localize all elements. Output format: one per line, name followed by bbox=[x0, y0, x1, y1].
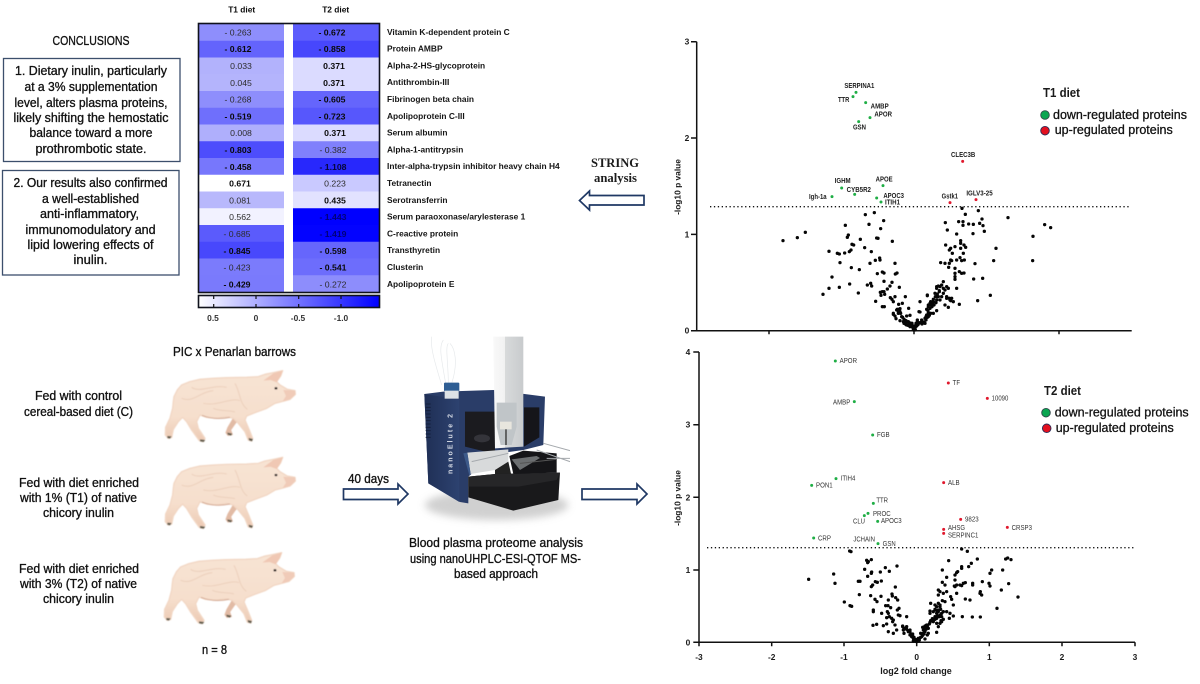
T2 axes: 0 bbox=[914, 652, 919, 662]
T2 diet values: - 1.443 bbox=[319, 212, 347, 222]
legend: T1 diet: up-regulated proteins bbox=[1055, 123, 1173, 137]
heatmap column headers bbox=[228, 5, 349, 15]
T1 diet values: 0.008 bbox=[230, 128, 252, 138]
T2 protein labels: SERPINC1 bbox=[948, 531, 978, 540]
protein names: Serum albumin bbox=[387, 128, 448, 138]
T1 diet values: - 0.612 bbox=[224, 44, 252, 54]
T1 protein labels: IGLV3-25 bbox=[966, 189, 993, 198]
T2 protein labels: PON1 bbox=[816, 481, 833, 490]
text: T1 diet: Fed with diet enriched bbox=[19, 476, 139, 490]
icon: pig T1 bbox=[165, 457, 295, 529]
legend: T2 diet bbox=[1042, 384, 1189, 435]
T2 protein labels: ALB bbox=[948, 478, 960, 487]
T2 protein labels: CRP bbox=[818, 533, 831, 542]
panel: conclusion 2: lipid lowering effects of bbox=[28, 238, 154, 252]
text: control diet bbox=[24, 389, 133, 419]
T2 protein labels: GSN bbox=[883, 539, 896, 548]
protein names: Fibrinogen beta chain bbox=[387, 94, 474, 104]
text: sample size: n = 8 bbox=[202, 643, 227, 657]
text: T2 diet: with 3% (T2) of native bbox=[19, 577, 137, 591]
text: 40 days: 40 days bbox=[348, 472, 389, 486]
T2 diet values: - 0.723 bbox=[318, 111, 346, 121]
text: control diet: Fed with control bbox=[35, 389, 122, 403]
T2 protein labels: JCHAIN bbox=[853, 535, 875, 544]
T2 diet values: - 1.419 bbox=[319, 229, 347, 239]
text: T2 diet bbox=[19, 562, 139, 606]
panel: conclusion 2: 2. Our results also confirmed bbox=[14, 176, 168, 190]
panel: conclusion 2: a well-established bbox=[42, 192, 139, 206]
T2 diet values: 0.435 bbox=[324, 195, 346, 205]
T2 axes: 3 bbox=[1133, 652, 1138, 662]
T2 non-significant points bbox=[809, 549, 1018, 642]
T1 protein labels: APOE bbox=[876, 175, 893, 184]
protein names: Serotransferrin bbox=[387, 195, 448, 205]
T2 axes: 2 bbox=[686, 492, 691, 502]
T1 diet values: - 0.803 bbox=[224, 145, 252, 155]
legend: T1 diet: T1 diet bbox=[1043, 86, 1081, 100]
arrow: STRING analysis to heatmap bbox=[580, 191, 644, 210]
T1 diet values: - 0.268 bbox=[224, 95, 252, 105]
panel: conclusion 2: inulin. bbox=[74, 253, 108, 267]
text: T1 diet: chicory inulin bbox=[43, 506, 114, 520]
legend: T2 diet: T2 diet bbox=[1044, 384, 1082, 398]
T2 protein labels: AMBP bbox=[833, 397, 850, 406]
T2 axes: -3 bbox=[695, 652, 703, 662]
T2 protein labels bbox=[816, 356, 1032, 548]
protein names: Vitamin K-dependent protein C bbox=[387, 27, 510, 37]
legend: T2 diet: up-regulated proteins bbox=[1056, 421, 1174, 435]
T2 diet values: - 0.541 bbox=[319, 263, 347, 273]
heatmap colour scale: 0 bbox=[254, 313, 259, 323]
T2 up-regulated points bbox=[944, 383, 1007, 533]
T1 diet values: 0.671 bbox=[229, 179, 251, 189]
T2 axes: -log10 p value bbox=[672, 470, 682, 526]
icon: pig control bbox=[165, 371, 295, 442]
panel: conclusion 1: likely shifting the hemostatic bbox=[14, 111, 168, 125]
T2 protein labels: CLU bbox=[853, 517, 865, 526]
T1 up-regulated points bbox=[950, 161, 976, 203]
T2 diet values: - 0.382 bbox=[319, 145, 347, 155]
T1 protein labels: CLEC3B bbox=[951, 150, 975, 159]
T1 protein labels: APOC3 bbox=[883, 191, 904, 200]
text: T1 diet: with 1% (T1) of native bbox=[19, 491, 137, 505]
T2 protein labels: APOR bbox=[840, 356, 857, 365]
volcano plot: T2 diet bbox=[672, 347, 1138, 676]
arrow: 40 days bbox=[344, 484, 408, 504]
heatmap column headers: T2 diet bbox=[322, 5, 349, 15]
T1 protein labels bbox=[809, 81, 993, 206]
T1 protein labels: IGHM bbox=[835, 176, 851, 185]
text: T1 diet bbox=[19, 476, 139, 520]
T2 protein labels: FGB bbox=[877, 430, 890, 439]
T2 protein labels: CRSP3 bbox=[1012, 523, 1032, 532]
T2 down-regulated points bbox=[812, 361, 878, 544]
protein names: Apolipoprotein C-III bbox=[387, 111, 465, 121]
protein names: Protein AMBP bbox=[387, 44, 443, 54]
T1 protein labels: Igh-1a bbox=[809, 192, 827, 201]
STRING analysis label bbox=[591, 155, 639, 185]
volcano plot: T1 diet bbox=[672, 37, 1132, 336]
T2 axes: -1 bbox=[840, 652, 848, 662]
T2 diet values: 0.223 bbox=[324, 179, 346, 189]
T2 diet values bbox=[318, 27, 347, 289]
T1 diet values: - 0.458 bbox=[224, 162, 252, 172]
T2 diet values: - 0.272 bbox=[319, 279, 347, 289]
icon: nanoElute 2 instrument bbox=[424, 337, 570, 520]
T2 diet values: 0.371 bbox=[323, 61, 345, 71]
T1 protein labels: ITIH1 bbox=[885, 197, 900, 206]
heatmap column headers: T1 diet bbox=[228, 5, 255, 15]
T2 diet values: - 0.672 bbox=[318, 27, 346, 37]
panel: conclusion 1 bbox=[4, 58, 180, 162]
T1 protein labels: CYB5R2 bbox=[847, 185, 871, 194]
T2 protein labels: TTR bbox=[876, 496, 888, 505]
T2 protein labels: 9823 bbox=[965, 515, 979, 524]
T1 axes: 3 bbox=[685, 37, 690, 47]
panel: conclusion 1: level, alters plasma proteins, bbox=[14, 96, 168, 110]
heading: animals: PIC x Penarlan barrows bbox=[173, 345, 296, 359]
T2 diet values: 0.371 bbox=[324, 128, 346, 138]
T1 diet values: 0.562 bbox=[229, 212, 251, 222]
T2 protein labels: APOC3 bbox=[881, 516, 902, 525]
T2 axes: 0 bbox=[686, 637, 691, 647]
T1 axes: 1 bbox=[685, 229, 690, 239]
protein names bbox=[387, 27, 560, 289]
T2 axes: 2 bbox=[1060, 652, 1065, 662]
heatmap colour scale: -0.5 bbox=[291, 313, 306, 323]
T2 diet values: - 0.858 bbox=[318, 44, 346, 54]
T2 axes: log2 fold change bbox=[880, 666, 952, 676]
T2 protein labels: 10090 bbox=[992, 393, 1008, 402]
text: T2 diet: chicory inulin bbox=[43, 592, 114, 606]
legend: T2 diet: down-regulated proteins bbox=[1055, 406, 1189, 420]
T2 diet values: - 1.108 bbox=[319, 162, 347, 172]
T1 diet values: - 0.845 bbox=[223, 246, 251, 256]
legend: T1 diet bbox=[1041, 86, 1187, 137]
T2 protein labels: TF bbox=[953, 378, 960, 387]
T1 axes: 2 bbox=[685, 133, 690, 143]
T2 axes: -2 bbox=[768, 652, 776, 662]
T1 protein labels: AMBP bbox=[871, 101, 889, 110]
T1 protein labels: TTR bbox=[838, 95, 850, 104]
protein names: Clusterin bbox=[387, 262, 423, 272]
T1 diet values: 0.081 bbox=[229, 195, 251, 205]
title: conclusions: CONCLUSIONS bbox=[52, 34, 130, 48]
T1 protein labels: APOR bbox=[874, 110, 893, 119]
protein names: Tetranectin bbox=[387, 178, 432, 188]
T1 diet values: - 0.423 bbox=[223, 263, 251, 273]
T1 diet values: - 0.685 bbox=[223, 229, 251, 239]
T1 protein labels: Gstk1 bbox=[942, 191, 958, 200]
T1 protein labels: GSN bbox=[853, 123, 866, 132]
icon: pig T2 bbox=[164, 553, 294, 624]
heatmap colour scale: 0.5 bbox=[207, 313, 219, 323]
T1 axes: -log10 p value bbox=[672, 159, 682, 215]
T2 axes: 1 bbox=[987, 652, 992, 662]
T2 diet values: - 0.605 bbox=[318, 95, 346, 105]
protein names: C-reactive protein bbox=[387, 228, 458, 238]
text: control diet: cereal-based diet (C) bbox=[24, 405, 133, 419]
panel: conclusion 1: at a 3% supplementation bbox=[24, 80, 158, 94]
T1 non-significant points bbox=[783, 208, 1051, 330]
T2 protein labels: PROC bbox=[873, 509, 891, 518]
T1 diet values bbox=[223, 27, 252, 289]
T1 diet values: 0.033 bbox=[230, 61, 252, 71]
text: proteome analysis: Blood plasma proteome analysis bbox=[409, 536, 583, 550]
T2 axes bbox=[672, 347, 1138, 676]
T2 protein labels: ITIH4 bbox=[841, 474, 855, 483]
panel: conclusion 2: anti-inflammatory, bbox=[40, 207, 139, 221]
heatmap colour scale: -1.0 bbox=[334, 313, 349, 323]
legend: T1 diet: down-regulated proteins bbox=[1053, 108, 1187, 122]
T1 diet values: - 0.429 bbox=[223, 279, 251, 289]
T1 diet values: - 0.519 bbox=[224, 111, 252, 121]
STRING analysis label: analysis bbox=[594, 170, 637, 185]
text: proteome analysis: using nanoUHPLC-ESI-QTOF MS- bbox=[410, 552, 581, 566]
T2 diet values: 0.371 bbox=[323, 78, 345, 88]
text: proteome analysis bbox=[409, 536, 583, 581]
heatmap bbox=[198, 5, 560, 323]
heatmap cells bbox=[198, 24, 380, 292]
protein names: Antithrombin-III bbox=[387, 77, 449, 87]
T1 axes: 0 bbox=[685, 326, 690, 336]
protein names: Apolipoprotein E bbox=[387, 279, 455, 289]
T1 diet values: - 0.263 bbox=[224, 27, 252, 37]
T1 diet values: 0.045 bbox=[230, 78, 252, 88]
T1 down-regulated points bbox=[832, 92, 883, 202]
panel: conclusion 1: prothrombotic state. bbox=[36, 142, 146, 156]
icon: nanoElute 2 instrument: nanoElute 2 bbox=[448, 414, 455, 474]
protein names: Serum paraoxonase/arylesterase 1 bbox=[387, 212, 526, 222]
T2 axes: 4 bbox=[686, 347, 691, 357]
heatmap colour scale bbox=[198, 296, 380, 323]
T2 diet values: - 0.598 bbox=[319, 246, 347, 256]
panel: conclusion 1: balance toward a more bbox=[30, 126, 153, 140]
panel: conclusion 1: 1. Dietary inulin, particularly bbox=[15, 64, 168, 78]
protein names: Alpha-2-HS-glycoprotein bbox=[387, 60, 485, 70]
protein names: Inter-alpha-trypsin inhibitor heavy chain H4 bbox=[387, 161, 560, 171]
text: T2 diet: Fed with diet enriched bbox=[19, 562, 139, 576]
protein names: Transthyretin bbox=[387, 245, 440, 255]
T1 protein labels: SERPINA1 bbox=[844, 81, 874, 90]
arrow: analysis to volcano plots bbox=[582, 484, 647, 504]
T1 axes bbox=[672, 37, 1132, 336]
T2 axes: 3 bbox=[686, 420, 691, 430]
T2 axes: 1 bbox=[686, 565, 691, 575]
protein names: Alpha-1-antitrypsin bbox=[387, 144, 463, 154]
panel: conclusion 2: immunomodulatory and bbox=[26, 223, 156, 237]
T2 protein labels: AHSG bbox=[948, 523, 965, 532]
text: proteome analysis: based approach bbox=[454, 567, 538, 581]
STRING analysis label: STRING bbox=[591, 155, 639, 170]
panel: conclusion 2 bbox=[2, 170, 179, 275]
